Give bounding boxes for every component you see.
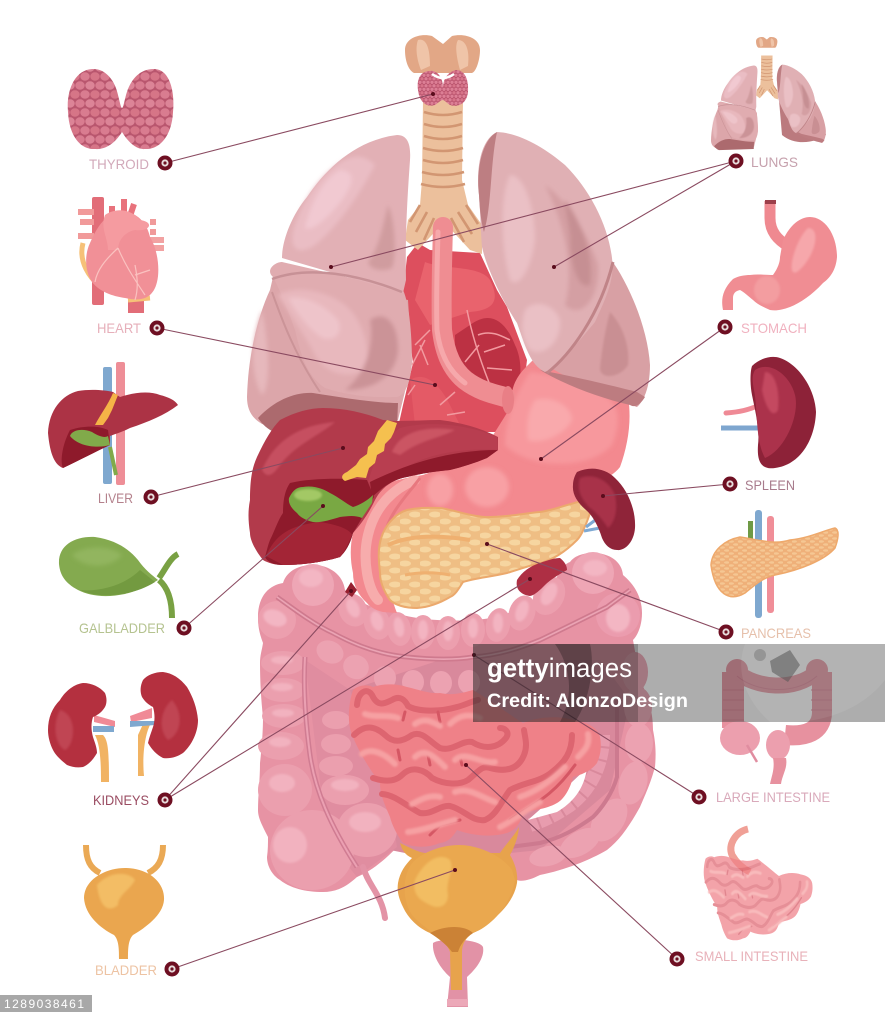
thumbnail: stomach [722,200,837,310]
gap [528,768,587,820]
label: thyroid: THYROID [89,156,149,172]
thumbnail: liver [48,362,178,485]
label: kidneys: KIDNEYS [93,792,149,808]
watermark credit text: Credit: AlonzoDesign [487,691,688,712]
label: small intestine: SMALL INTESTINE [695,948,808,964]
pancreas [379,500,591,608]
small intestine [349,684,601,847]
watermark banner [473,644,885,722]
lungs and trachea [247,35,650,432]
descending colon [510,652,653,870]
label: stomach: STOMACH [741,320,807,336]
thumbnail: pancreas [711,510,838,618]
trachea [405,35,482,254]
spleen [573,469,635,550]
thumbnail: lungs [711,37,826,150]
thumbnail: spleen [721,357,816,468]
ascending colon [258,651,397,890]
label: galbladder: GALBLADDER [79,620,165,636]
thumbnail: gallbladder [59,537,178,618]
label: lungs: LUNGS [751,154,798,170]
label: pancreas: PANCREAS [741,625,811,641]
liver [248,408,498,565]
thyroid [418,70,468,106]
image id tag: 1289038461 [4,997,84,1011]
watermark logo text: gettyimages [487,653,632,683]
label: spleen: SPLEEN [745,477,795,493]
label: heart: HEART [97,320,141,336]
falciform ligament [342,420,397,481]
gallbladder [289,487,373,522]
large intestine [258,552,656,918]
thumbnail: large intestine [720,659,832,784]
right lung [478,132,650,407]
target markers [144,154,744,976]
leader lines [151,94,736,969]
appendix [363,867,385,918]
transverse colon lobes [258,552,640,695]
label: bladder: BLADDER [95,962,157,978]
central anatomy figure [247,35,656,1007]
esophagus [437,227,514,414]
thumbnail: kidneys [48,672,198,782]
left lung [247,135,412,432]
kidney fragments [345,558,567,597]
thumbnail: thyroid [68,69,173,149]
thumbnail: heart [78,197,164,313]
organ anchor dots [321,92,605,872]
thumbnail: small intestine [704,829,813,940]
bladder [398,827,519,1007]
label: liver: LIVER [98,490,133,506]
thumbnail: bladder [84,845,164,959]
heart [397,243,527,432]
label: large intestine: LARGE INTESTINE [716,789,830,805]
stomach [351,358,630,613]
